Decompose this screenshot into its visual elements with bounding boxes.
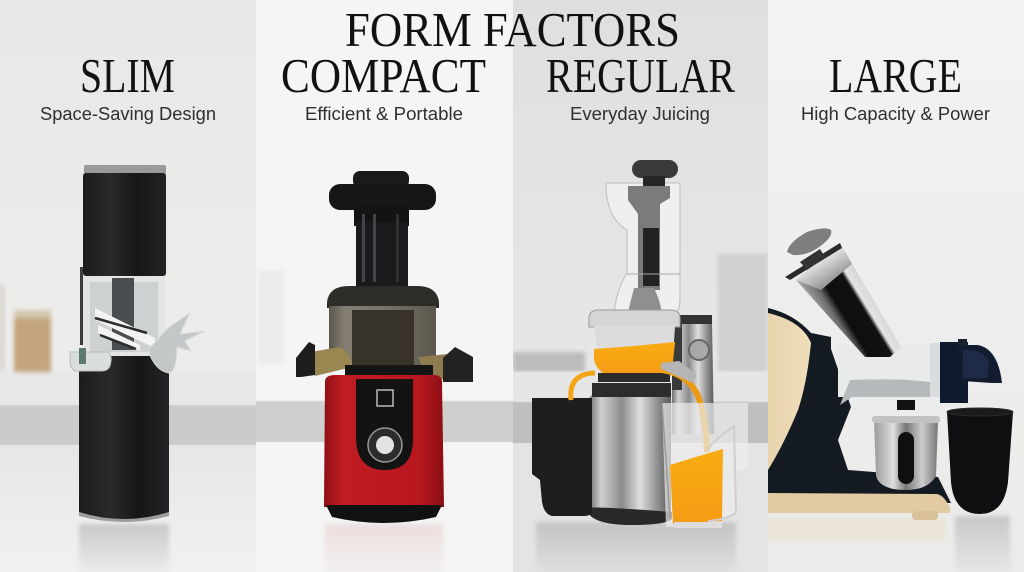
heading: compact: COMPACT [281, 48, 486, 103]
icon: compact juicer [296, 171, 473, 572]
text: large subtitle: High Capacity & Power [801, 104, 990, 124]
heading: large: LARGE [829, 48, 962, 103]
text: compact subtitle: Efficient & Portable [305, 104, 463, 124]
heading: regular: REGULAR [546, 48, 735, 103]
icon: regular juicer [532, 160, 748, 572]
text: regular subtitle: Everyday Juicing [570, 104, 710, 124]
heading: slim: SLIM [80, 48, 175, 103]
panel: compact [256, 171, 513, 548]
icon: slim juicer [70, 165, 205, 572]
panel: large [768, 228, 1014, 570]
panel: slim [0, 165, 256, 564]
panel: regular [503, 0, 778, 572]
title: FORM FACTORS [345, 2, 680, 57]
icon: large juicer [760, 228, 1013, 572]
text: slim subtitle: Space-Saving Design [40, 104, 216, 124]
